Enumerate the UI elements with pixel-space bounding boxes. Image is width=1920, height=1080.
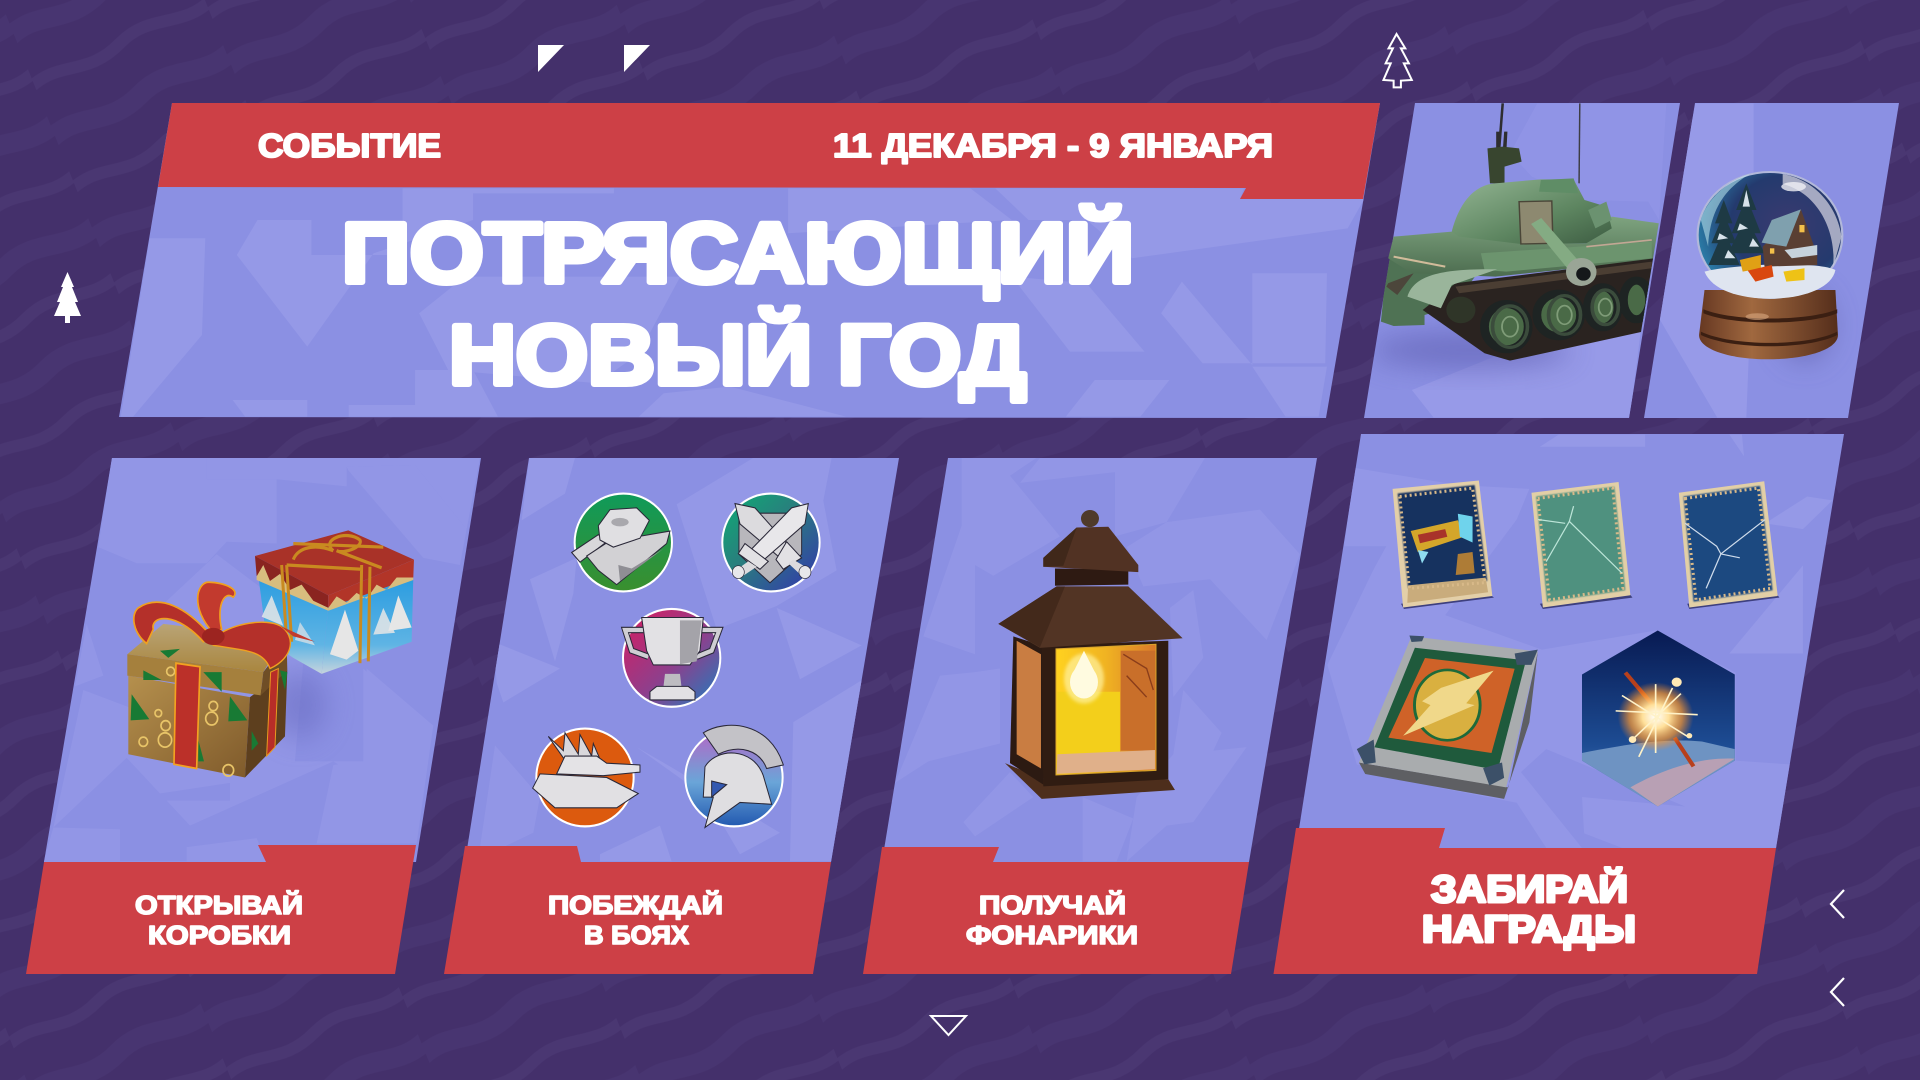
icon: down triangle bbox=[931, 1016, 966, 1035]
card: blue bbox=[1679, 481, 1779, 609]
reward items group bbox=[1357, 480, 1779, 807]
card: cannon bbox=[1393, 480, 1494, 609]
hexagon: sparkler bbox=[1582, 630, 1735, 807]
caption: НАГРАДЫ bbox=[1422, 909, 1636, 951]
snow globe illustration bbox=[1698, 172, 1842, 359]
red caption ribbon bbox=[1274, 828, 1776, 974]
panel: snow globe bbox=[1644, 103, 1899, 418]
icon: outlined fir tree bbox=[1383, 34, 1412, 87]
badge: spartan helmet bbox=[685, 725, 783, 827]
caption: В БОЯХ bbox=[584, 920, 690, 950]
gold gift box bbox=[127, 582, 315, 777]
label: event: СОБЫТИЕ bbox=[258, 127, 441, 164]
caption: ПОЛУЧАЙ bbox=[979, 890, 1126, 920]
panel: win battles bbox=[444, 458, 899, 974]
caption: КОРОБКИ bbox=[148, 920, 291, 950]
panel: tank bbox=[1364, 103, 1680, 418]
panel: lanterns bbox=[863, 458, 1317, 974]
caption bbox=[1422, 866, 1636, 951]
panel: main title banner bbox=[119, 103, 1380, 418]
icon: white corner triangle right bbox=[624, 45, 650, 72]
panel: open boxes bbox=[26, 458, 481, 974]
blue gift box bbox=[255, 530, 414, 674]
caption: ЗАБИРАЙ bbox=[1431, 866, 1628, 911]
card: green bbox=[1531, 482, 1632, 609]
red caption ribbon bbox=[863, 847, 1249, 974]
caption: ОТКРЫВАЙ bbox=[135, 890, 303, 920]
badge: trophy bbox=[623, 609, 720, 707]
badge icons group bbox=[533, 494, 820, 827]
gift shadow bbox=[274, 671, 326, 739]
caption: ФОНАРИКИ bbox=[966, 920, 1138, 950]
plate: nameplate with lightning bbox=[1357, 635, 1538, 799]
tank shadow bbox=[1370, 332, 1570, 368]
caption bbox=[135, 890, 303, 950]
icon: chevron left lower bbox=[1831, 978, 1844, 1006]
badge: spiked tank bbox=[533, 729, 640, 826]
caption bbox=[966, 890, 1138, 950]
red caption ribbon bbox=[26, 845, 416, 974]
globe shadow bbox=[1779, 289, 1831, 361]
title line 1: ПОТРЯСАЮЩИЙ bbox=[342, 206, 1134, 300]
caption bbox=[548, 890, 723, 950]
icon: white corner triangle left bbox=[538, 45, 564, 72]
gift illustrations bbox=[127, 530, 414, 777]
caption: ПОБЕЖДАЙ bbox=[548, 890, 723, 920]
panel: rewards bbox=[1274, 434, 1844, 974]
badge: tank bbox=[572, 494, 672, 591]
icon: chevron left upper bbox=[1831, 890, 1844, 918]
label: event dates: 11 ДЕКАБРЯ - 9 ЯНВАРЯ bbox=[833, 127, 1273, 164]
tank illustration bbox=[1381, 103, 1659, 361]
icon: solid fir tree bbox=[54, 272, 81, 323]
red caption ribbon bbox=[444, 846, 831, 974]
badge: crossed swords bbox=[722, 494, 820, 591]
title line 2: НОВЫЙ ГОД bbox=[449, 308, 1026, 402]
lantern illustration bbox=[998, 510, 1183, 799]
red header ribbon bbox=[158, 103, 1380, 199]
